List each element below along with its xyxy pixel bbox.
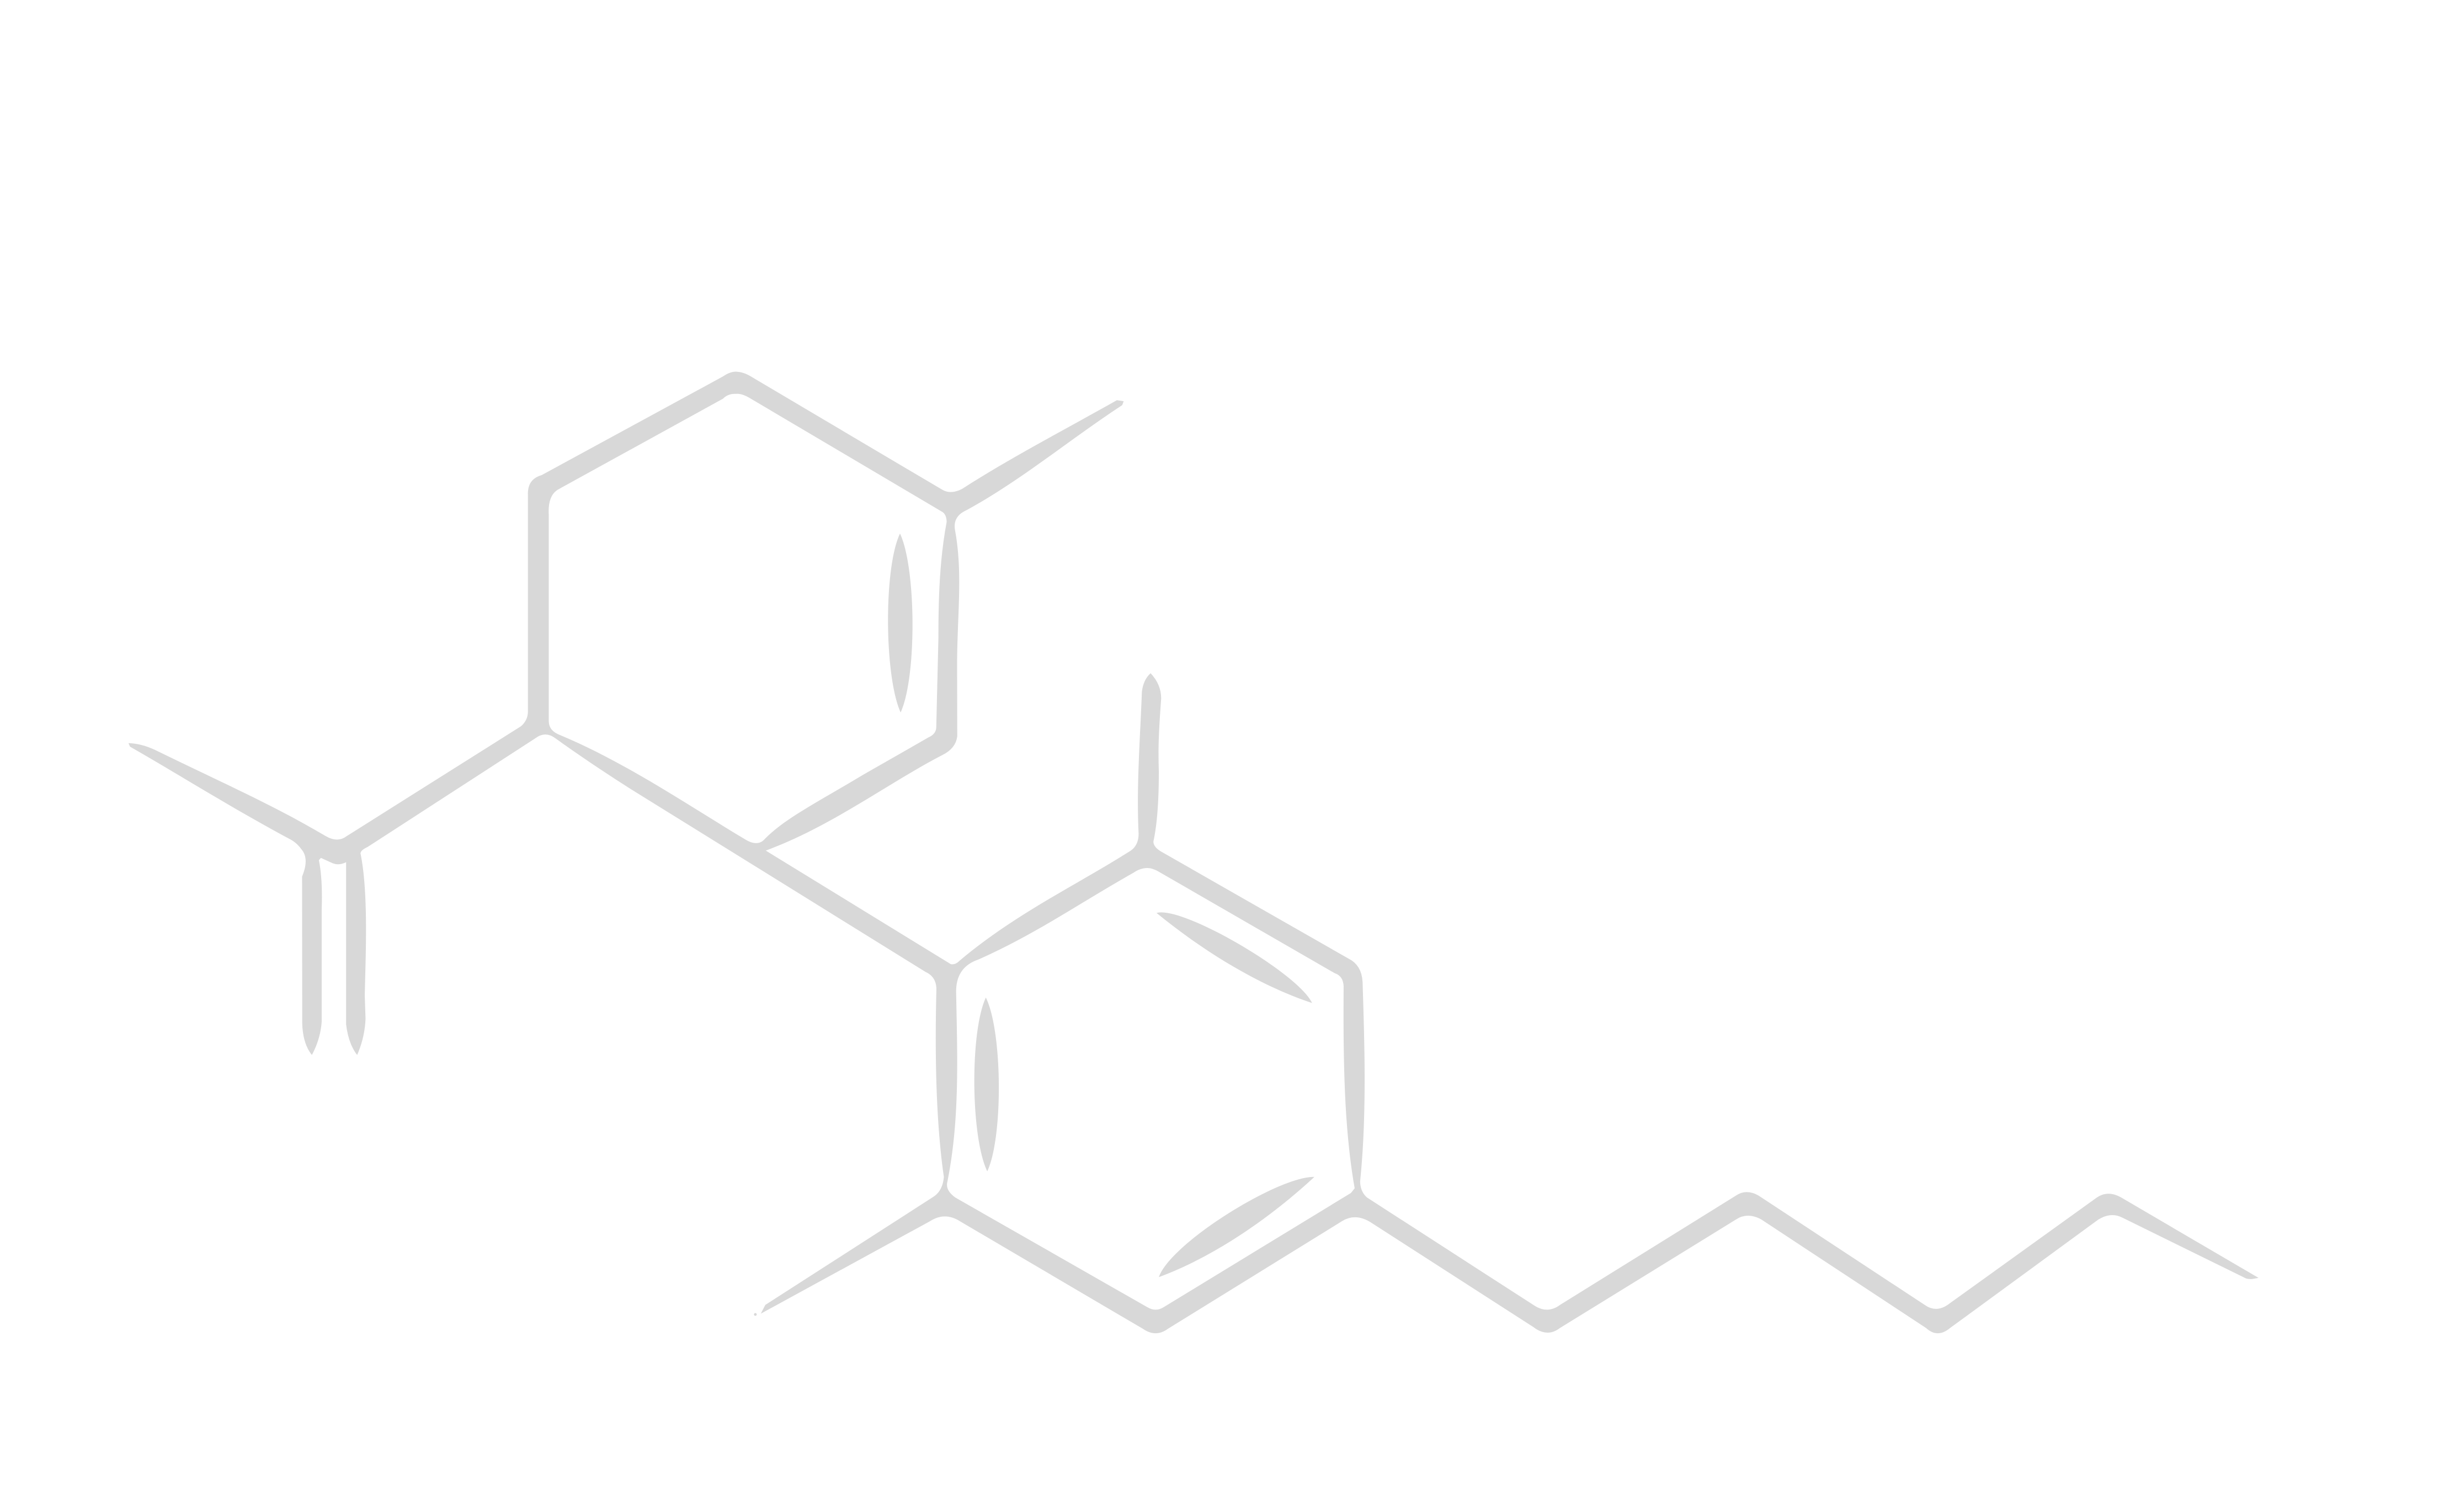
small speck near lower-left bond tip — [754, 1313, 757, 1316]
molecule skeleton: rings, side groups and tail — [129, 371, 2259, 1333]
double bond: upper ring — [888, 534, 913, 712]
double bond: lower ring left — [974, 998, 999, 1172]
double bond: lower ring upper right — [1157, 912, 1312, 1003]
double bond: lower ring lower right — [1159, 1177, 1314, 1277]
